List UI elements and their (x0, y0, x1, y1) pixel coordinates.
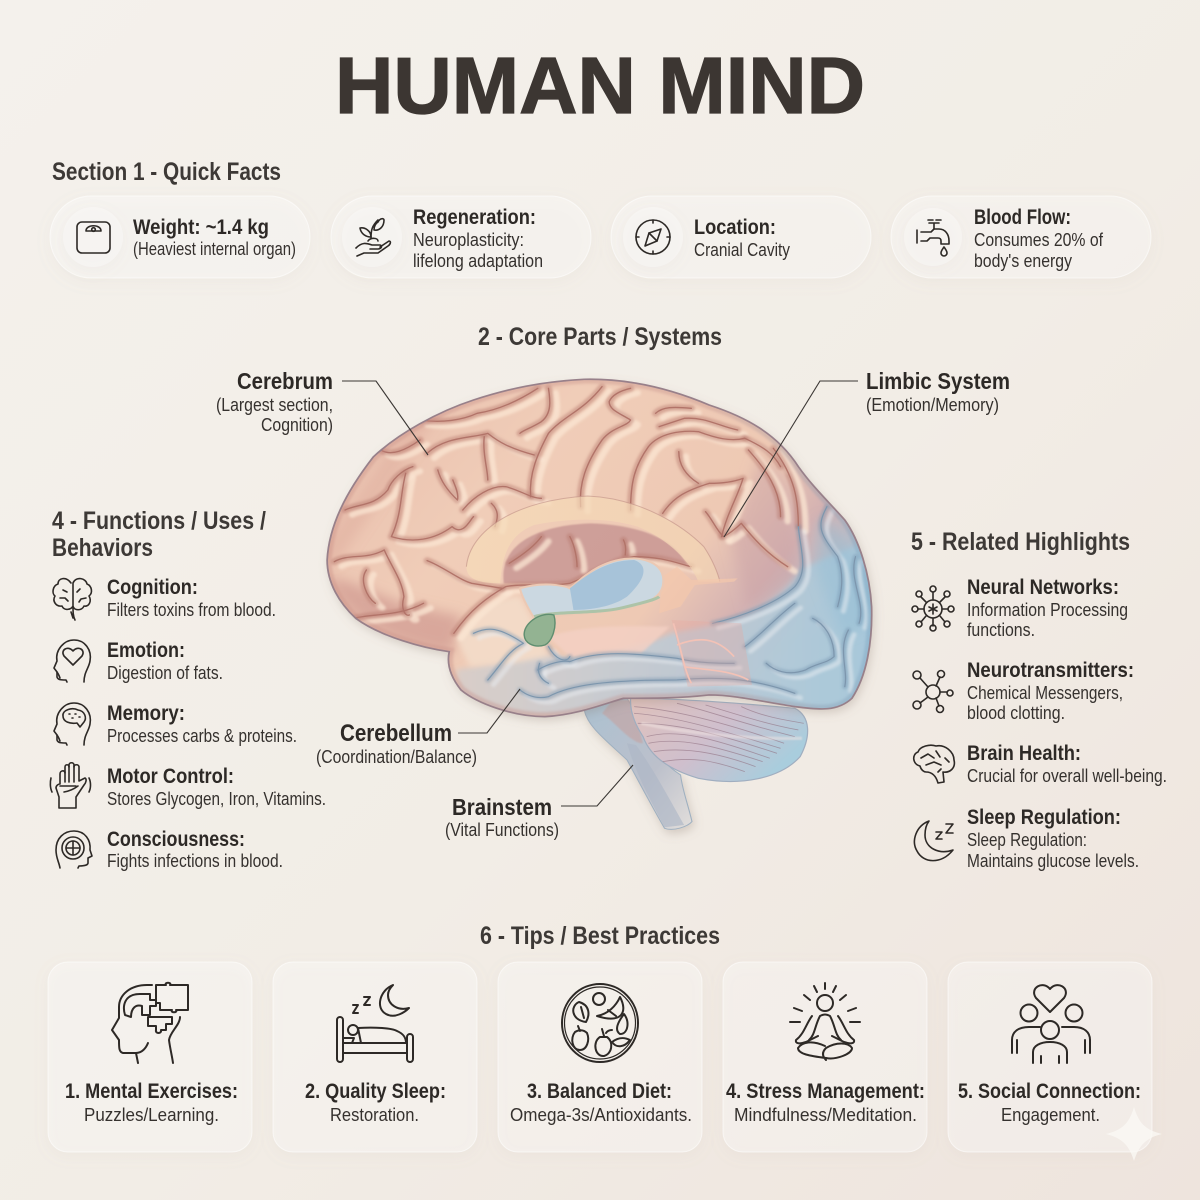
illustration: brain (327, 379, 877, 829)
item: neurotransmitters: blood clotting. (967, 702, 1065, 723)
card: balanced diet: Omega-3s/Antioxidants. (510, 1104, 692, 1125)
inner mauve (503, 523, 688, 583)
panel: weight: (Heaviest internal organ) (133, 238, 296, 259)
item: memory: Memory: (107, 701, 185, 725)
panel: blood flow: Blood Flow: (974, 205, 1071, 229)
sulci lines (334, 387, 798, 633)
item: memory (54, 701, 297, 746)
item: consciousness: Consciousness: (107, 827, 245, 851)
card: balanced diet (498, 962, 702, 1152)
heading: functions: 4 - Functions / Uses / (52, 507, 266, 535)
item: brain health: Crucial for overall well-being. (967, 765, 1167, 786)
callout: brainstem (445, 765, 633, 840)
item: emotion: Digestion of fats. (107, 662, 223, 683)
callout: cerebellum: (Coordination/Balance) (316, 746, 477, 767)
panel: location: Cranial Cavity (694, 239, 791, 260)
item: neural networks: Neural Networks: (967, 575, 1119, 599)
icon: bed with moon (337, 985, 413, 1062)
pink band (672, 620, 752, 687)
amygdala (524, 614, 555, 646)
heading: highlights: 5 - Related Highlights (911, 528, 1130, 556)
callout: cerebellum: Cerebellum (340, 720, 452, 747)
callout: brainstem: Brainstem (452, 794, 552, 820)
icon: hand (50, 763, 90, 808)
shading blobs (327, 577, 463, 653)
icon: meditation (790, 983, 860, 1060)
panel: regeneration (331, 196, 591, 278)
card: quality sleep: Restoration. (330, 1104, 419, 1125)
icon: molecule (913, 670, 953, 712)
panel: regeneration: Regeneration: (413, 205, 536, 229)
card: quality sleep: 2. Quality Sleep: (305, 1079, 446, 1103)
heading: tips: 6 - Tips / Best Practices (480, 922, 720, 950)
item: cognition: Cognition: (107, 575, 198, 599)
item: brain health (914, 741, 1167, 786)
item: sleep regulation: Maintains glucose levels. (967, 850, 1139, 871)
item: neurotransmitters: Chemical Messengers, (967, 682, 1123, 703)
item: neural networks (912, 575, 1128, 640)
item: sleep regulation: Sleep Regulation: (967, 829, 1087, 850)
icon: plate of food (562, 984, 638, 1062)
limbic arc (466, 496, 720, 583)
panel: regeneration: lifelong adaptation (413, 250, 543, 271)
sulci soft shadow (334, 387, 798, 633)
panel: weight (50, 196, 310, 278)
icon: moon and z (914, 821, 953, 861)
item: emotion: Emotion: (107, 638, 185, 662)
card: mental exercises (48, 962, 252, 1152)
heading: core parts: 2 - Core Parts / Systems (478, 323, 722, 351)
icon: head with heart (54, 640, 90, 682)
heading: functions (52, 507, 266, 562)
panel: weight: Weight: ~1.4 kg (133, 215, 269, 239)
icon: network (912, 586, 954, 631)
icon: people and heart (1012, 985, 1090, 1063)
card: stress management: Mindfulness/Meditation. (734, 1104, 917, 1125)
panel: location: Location: (694, 215, 776, 239)
icon: brain side (914, 745, 954, 783)
item: neurotransmitters: Neurotransmitters: (967, 658, 1134, 682)
heading: section 1: Section 1 - Quick Facts (52, 158, 281, 186)
icon: head with gear (56, 831, 92, 868)
item: cognition (53, 575, 276, 620)
callout: cerebrum: Cerebrum (237, 368, 333, 394)
callout: limbic system: (Emotion/Memory) (866, 394, 999, 415)
card: mental exercises: 1. Mental Exercises: (65, 1079, 238, 1103)
item: motor control: Motor Control: (107, 764, 234, 788)
icon: scale (77, 222, 110, 253)
item: consciousness (56, 827, 283, 871)
callout: brainstem: (Vital Functions) (445, 819, 559, 840)
callout: limbic system (724, 368, 1010, 537)
item: emotion (54, 638, 223, 683)
card: stress management: 4. Stress Management: (726, 1079, 925, 1103)
card: social connection (948, 962, 1152, 1152)
icon: tap (917, 220, 949, 256)
panel: location (611, 196, 871, 278)
item: brain health: Brain Health: (967, 741, 1081, 765)
item: neurotransmitters (913, 658, 1134, 723)
title: HUMAN MIND (335, 41, 865, 130)
hippocampus blue (520, 558, 663, 618)
heading: functions: Behaviors (52, 534, 153, 562)
item: sleep regulation: Sleep Regulation: (967, 805, 1121, 829)
card: mental exercises: Puzzles/Learning. (84, 1104, 219, 1125)
brainstem (584, 698, 692, 829)
panel: blood flow: Consumes 20% of (974, 229, 1104, 250)
item: consciousness: Fights infections in blood. (107, 850, 283, 871)
card: balanced diet: 3. Balanced Diet: (527, 1079, 672, 1103)
icon: plant in hand (356, 219, 390, 256)
item: motor control (50, 763, 326, 809)
item: neural networks: Information Processing (967, 599, 1128, 620)
item: neural networks: functions. (967, 619, 1035, 640)
icon: head with brain (54, 703, 90, 745)
gyrus rim highlights (341, 391, 806, 638)
icon: compass (636, 220, 670, 254)
panel: blood flow (891, 196, 1151, 278)
item: cognition: Filters toxins from blood. (107, 599, 276, 620)
callout: cerebellum (316, 689, 520, 767)
callout: limbic system: Limbic System (866, 368, 1010, 394)
card: stress management (723, 962, 927, 1152)
item: sleep regulation (914, 805, 1139, 871)
icon: brain front (53, 579, 91, 620)
item: motor control: Stores Glycogen, Iron, Vitamins. (107, 788, 326, 809)
card: quality sleep (273, 962, 477, 1152)
edge rim (327, 379, 872, 717)
item: memory: Processes carbs & proteins. (107, 725, 297, 746)
panel: regeneration: Neuroplasticity: (413, 229, 524, 250)
card: social connection: Engagement. (1001, 1104, 1100, 1125)
callout: cerebrum (216, 368, 428, 455)
callout: cerebrum: (Largest section, (216, 394, 333, 415)
card: social connection: 5. Social Connection: (958, 1079, 1141, 1103)
panel: blood flow: body's energy (974, 250, 1073, 271)
cerebrum surface (327, 379, 872, 717)
cerebellum (631, 698, 808, 781)
icon: head with puzzle (112, 983, 188, 1063)
outline (327, 379, 872, 717)
icon: sparkle (1106, 1107, 1162, 1161)
callout: cerebrum: Cognition) (261, 414, 333, 435)
